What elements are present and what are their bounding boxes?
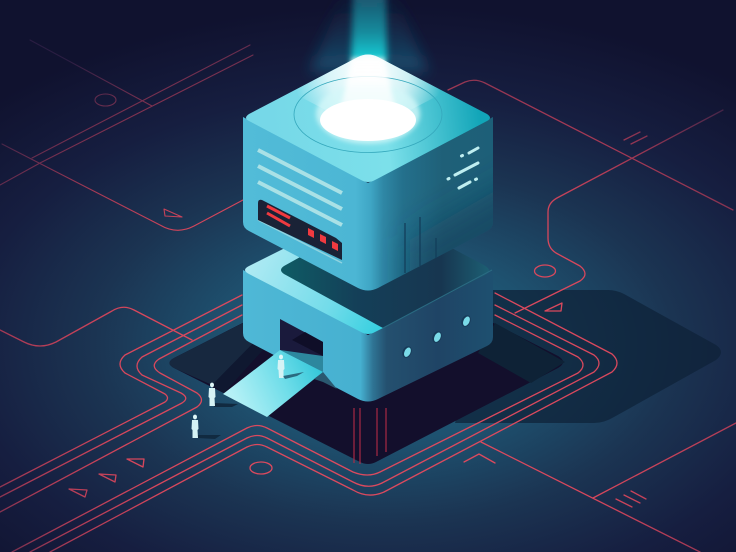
server cube — [243, 54, 493, 290]
display lights — [308, 228, 338, 251]
top-left circuit traces — [0, 40, 253, 230]
display panel — [258, 200, 342, 263]
top ring — [294, 76, 442, 152]
ground ellipse marker — [250, 462, 272, 474]
bottom triple traces — [12, 293, 617, 552]
light beam above the cube — [310, 0, 428, 72]
portholes — [400, 314, 473, 359]
lower-right circuit traces — [464, 423, 736, 552]
display bars — [267, 206, 290, 226]
tower base — [243, 210, 493, 402]
top-right circuit traces — [448, 80, 733, 313]
glow opening — [316, 84, 420, 144]
triangle markers — [69, 459, 144, 497]
left triple traces — [0, 295, 242, 512]
ground shadow of the tower — [455, 290, 721, 423]
person on ground — [192, 415, 221, 439]
base rim line — [383, 270, 492, 328]
pit under the tower — [170, 260, 565, 464]
vertical grooves — [405, 217, 436, 273]
cube side faces — [243, 117, 493, 290]
base side faces — [243, 270, 493, 402]
inner beam on top face — [340, 58, 396, 112]
entrance ramp — [223, 350, 337, 417]
doorway floor shade — [292, 332, 323, 356]
people — [192, 355, 304, 439]
base recessed top — [280, 210, 489, 328]
apex glow — [291, 54, 445, 132]
person at pit edge — [208, 383, 238, 407]
dashes on right face — [448, 148, 478, 188]
ramp side wedge — [314, 372, 337, 389]
right face shading — [397, 186, 493, 278]
pit shade right of tower — [478, 323, 565, 383]
vent slats — [258, 150, 342, 225]
base light top strip — [245, 247, 383, 334]
person on ramp — [278, 355, 304, 379]
cube top face — [246, 54, 490, 182]
doorway — [280, 319, 323, 372]
pit shade left of ramp — [170, 322, 272, 392]
red lines in the pit — [354, 408, 386, 464]
